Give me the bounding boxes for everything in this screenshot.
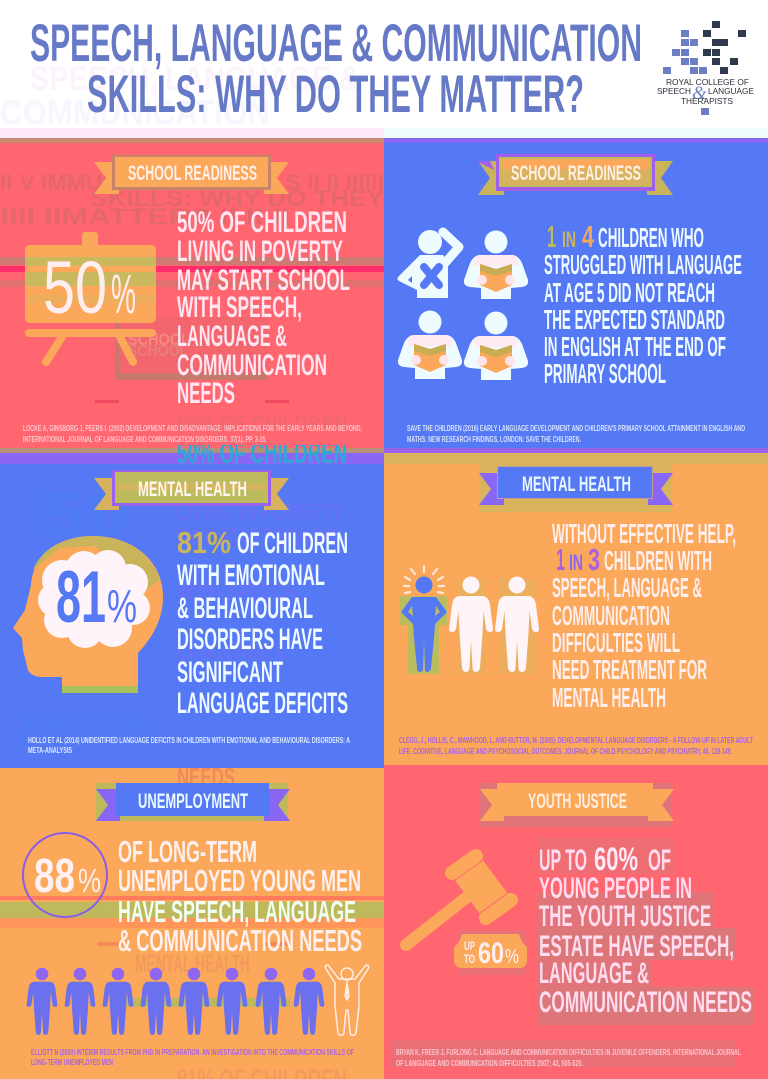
banner: school readiness	[478, 154, 673, 195]
banner: mental health	[94, 470, 289, 510]
panel: mental health, 81% of children: 50% OF CHILDREN	[177, 437, 347, 470]
panel: school readiness, 50% of children: SCHOOL	[128, 330, 190, 349]
statistic text: & BEHAVIOURAL	[177, 592, 313, 625]
panel: mental health, 81% of children: LIVING IN POVERTY	[177, 499, 343, 526]
citation: HOLLO ET AL (2014) UNIDENTIFIED LANGUAGE DEFICITS IN CHILDREN WITH EMOTIONAL AND BEHAVIOURAL DISORDERS: A	[28, 736, 350, 745]
statistic text: IN	[569, 550, 583, 575]
citation: LONG-TERM UNEMPLOYED MEN	[31, 1058, 113, 1067]
panel: school readiness, 50% of children: II V IMMUNICATION SKILLS II II IIIIII	[0, 170, 384, 195]
statistic text	[177, 525, 348, 720]
statistic text: 4	[582, 219, 595, 254]
icon: 88% circle: 88	[34, 850, 75, 903]
panel: school readiness, 1 in 4 children	[384, 138, 768, 453]
badge: up to 60%: TO	[464, 952, 475, 966]
statistic text: IN	[562, 227, 576, 252]
statistic text: 1	[556, 542, 565, 577]
panel: mental health, 81% of children: 50	[40, 481, 130, 548]
panel: mental health, 1 in 3 children	[384, 453, 768, 768]
logo: Royal College of Speech & Language Therapists: SPEECH	[657, 86, 691, 96]
citation	[28, 736, 350, 755]
banner: youth justice	[480, 783, 674, 821]
statistic text	[552, 518, 736, 713]
panel: mental health, 81% of children: MAY START SCHOOL	[177, 524, 347, 551]
panel: mental health, 81% of children: NEEDS	[20, 714, 150, 741]
statistic text: OF	[648, 844, 671, 877]
infographic: SPEECH, LANGUAGE &	[30, 60, 360, 98]
statistic text: UP TO	[539, 844, 587, 877]
statistic text: WITH SPEECH,	[177, 291, 302, 324]
citation: MATHS: NEW RESEARCH FINDINGS, LONDON: SAVE THE CHILDREN.	[407, 435, 581, 444]
banner: school readiness	[94, 155, 289, 194]
statistic text: MAY START SCHOOL	[177, 264, 350, 297]
citation: META-ANALYSIS	[28, 746, 72, 755]
statistic text: LANGUAGE &	[539, 957, 649, 990]
icon: child struggling with X	[398, 230, 459, 298]
statistic text: 3	[588, 542, 600, 577]
panel: school readiness, 50% of children: 50% OF CHILDREN	[177, 413, 347, 435]
badge: up to 60%: 60	[478, 937, 504, 970]
icon: head with brain cloud and 81%: 81	[56, 557, 106, 638]
citation	[396, 1048, 741, 1068]
citation	[31, 1048, 354, 1067]
statistic text: WITH EMOTIONAL	[177, 559, 325, 592]
citation	[407, 424, 745, 444]
banner: mental health: MENTAL HEALTH	[522, 472, 631, 496]
banner: school readiness: SCHOOL READINESS	[511, 161, 641, 185]
panel: mental health, 81% of children: LANGUAGE &	[177, 639, 287, 666]
citation	[23, 424, 362, 444]
icon: gavel	[406, 856, 511, 945]
logo: Royal College of Speech & Language Therapists	[657, 21, 754, 115]
statistic text: DISORDERS HAVE	[177, 623, 323, 656]
icon: easel with 50%: 50	[43, 246, 107, 329]
statistic text: LIVING IN POVERTY	[177, 235, 343, 268]
panel: unemployment, 88% of young men	[0, 762, 384, 1079]
icon: child reading	[464, 230, 528, 299]
panel: school readiness, 50% of children: IIII IIMATTER? II II II	[0, 204, 290, 229]
statistic text: 1	[547, 219, 556, 254]
statistic text: LANGUAGE DEFICITS	[177, 687, 348, 720]
statistic text: UNEMPLOYED YOUNG MEN	[118, 863, 361, 898]
panel: mental health, 81% of children	[0, 437, 384, 768]
citation: OF LANGUAGE AND COMMUNICATION DIFFICULTIES 2007; 42, 505-520.	[396, 1059, 583, 1068]
icon: row of eight people, one celebrating	[27, 965, 369, 1035]
icon: head with brain cloud and 81%	[13, 536, 163, 693]
icon: easel with 50%: %	[111, 262, 136, 325]
icon: 88% circle	[23, 833, 107, 917]
statistic text	[539, 841, 752, 1019]
logo: Royal College of Speech & Language Therapists: &	[692, 83, 707, 104]
statistic text: LANGUAGE &	[177, 320, 287, 353]
statistic text: HAVE SPEECH, LANGUAGE	[118, 894, 356, 929]
panel: youth justice, up to 60%	[384, 768, 768, 1079]
panel: school readiness, 50% of children	[0, 138, 384, 453]
panel: title header	[30, 14, 754, 124]
banner: mental health: MENTAL HEALTH	[138, 477, 247, 501]
panel: unemployment, 88% of young men: MENTAL HEALTH	[135, 950, 250, 978]
logo: Royal College of Speech & Language Therapists: ROYAL COLLEGE OF	[666, 77, 749, 87]
statistic text: COMMUNICATION	[177, 349, 327, 382]
logo: Royal College of Speech & Language Therapists: LANGUAGE	[708, 86, 754, 96]
panel: mental health, 81% of children: WITH SPEECH,	[177, 579, 302, 606]
banner: unemployment	[96, 783, 290, 821]
citation: ELLIOTT N (2009) INTERIM RESULTS FROM PHD IN PREPARATION. AN INVESTIGATION INTO THE COMMUNICATION SKILLS OF	[31, 1048, 354, 1057]
banner: school readiness: SCHOOL READINESS	[128, 161, 257, 185]
statistic text: 81%	[177, 525, 231, 560]
citation: INTERNATIONAL JOURNAL OF LANGUAGE AND COMMUNICATION DISORDERS, 37(1), PP. 3-15.	[23, 435, 267, 444]
panel: school readiness, 50% of children: SKILLS: WHY DO THEY	[90, 186, 384, 211]
statistic text: & COMMUNICATION NEEDS	[118, 923, 362, 958]
icon: 88% circle: %	[78, 862, 101, 899]
icon: child reading	[398, 310, 462, 379]
badge: up to 60%: UP	[464, 939, 475, 953]
panel: unemployment, 88% of young men: NEEDS	[177, 762, 235, 792]
badge: up to 60%: %	[505, 946, 519, 968]
citation: LOCKE A, GINSBORG J, PEERS I. (2002) DEVELOPMENT AND DISADVANTAGE: IMPLICATIONS FOR THE EARLY YEARS AND BEYOND,	[23, 424, 362, 433]
citation	[399, 736, 753, 756]
statistic text	[544, 219, 742, 389]
statistic text: OF LONG-TERM	[118, 834, 257, 869]
banner: unemployment: UNEMPLOYMENT	[138, 789, 248, 813]
badge: up to 60%	[454, 934, 527, 970]
infographic: COMMUNICATION	[0, 94, 270, 132]
statistic text: SIGNIFICANT	[177, 656, 283, 689]
statistic text: 50% OF CHILDREN	[177, 206, 347, 239]
banner: mental health	[479, 463, 673, 512]
statistic text	[118, 834, 362, 958]
icon: easel with 50%	[25, 232, 156, 362]
icon: child reading	[464, 312, 528, 380]
statistic text: 60%	[594, 841, 638, 877]
icon: three people, one highlighted	[400, 566, 539, 675]
statistic text: OF CHILDREN	[237, 527, 348, 560]
title	[30, 14, 642, 124]
panel: school readiness, 50% of children: SCHOOL	[128, 341, 188, 360]
statistic text: NEEDS	[177, 377, 235, 410]
icon: head with brain cloud and 81%: %	[107, 580, 137, 632]
banner: youth justice: YOUTH JUSTICE	[528, 789, 627, 813]
logo: Royal College of Speech & Language Therapists: THERAPISTS	[681, 96, 733, 106]
statistic text	[177, 206, 350, 410]
